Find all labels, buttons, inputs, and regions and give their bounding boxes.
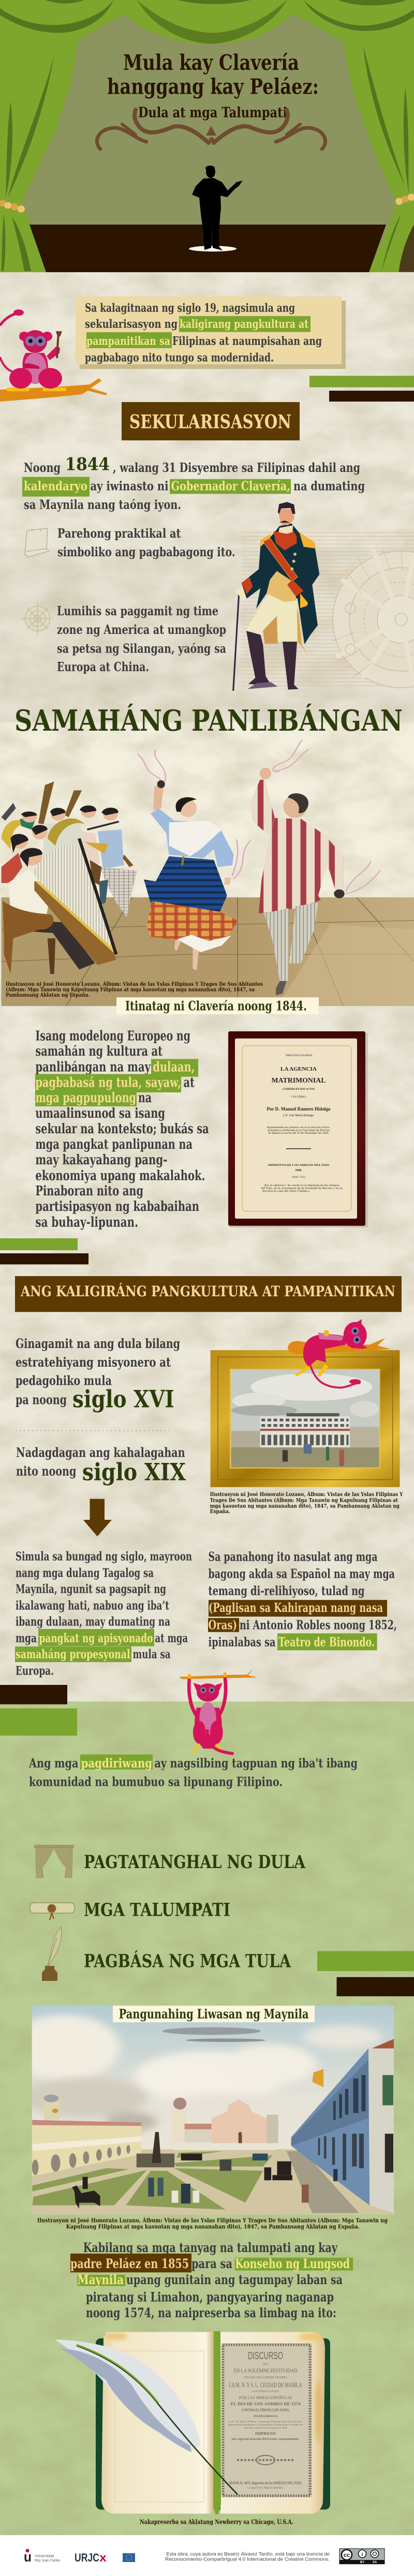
badge: CC BY SA: SA bbox=[373, 2561, 377, 2564]
framed document: La Agencia Matrimonial: Y EN VERSO, bbox=[291, 1096, 306, 1099]
decorative bars section change bbox=[0, 1685, 77, 1736]
text: siglo XIX bbox=[16, 1445, 186, 1486]
framed document: La Agencia Matrimonial: BIBLIOTECA FILIPINA bbox=[286, 1055, 313, 1057]
framed document: La Agencia Matrimonial: COMEDIA EN DOS ACTOS bbox=[283, 1088, 315, 1091]
intro text: Sa kalagitnaan ng siglo 19, nagsimula ang bbox=[85, 301, 295, 315]
text: time zone: zone ng America at umangkop bbox=[57, 622, 226, 637]
framed document: La Agencia Matrimonial: LA AGENCIA bbox=[280, 1067, 317, 1072]
text: siglo XIX: siglo XIX bbox=[82, 1458, 186, 1486]
caption: Liwasan bbox=[37, 2217, 388, 2230]
paragraph: mga dulang Tagalog: Maynila, ngunit sa pagsapit ng bbox=[16, 1582, 166, 1596]
logo: Universidad Rey Juan Carlos bbox=[24, 2549, 60, 2565]
left building bbox=[32, 2095, 141, 2176]
framed document: La Agencia Matrimonial: de Manila la noche del 10 de Diciembre de 1846. bbox=[268, 1132, 329, 1135]
paragraph: mga bagong akda: Teatro de Binondo. bbox=[278, 1634, 375, 1649]
paragraph: European model: partisipasyon ng kababaihan bbox=[35, 1199, 199, 1215]
framed document: La Agencia Matrimonial: IMPRENTA DE LOS AMIGOS DEL PAIS bbox=[268, 1164, 329, 1167]
logo: URJCx: URJC bbox=[75, 2551, 99, 2564]
icon: scroll bbox=[30, 1903, 75, 1920]
paragraph: mga dulang Tagalog: ibang dulaan, may dumating na bbox=[16, 1615, 170, 1629]
paragraph: mga dulang Tagalog: Europa. bbox=[16, 1664, 54, 1678]
decorative bars right bbox=[317, 1951, 414, 1996]
framed document: La Agencia Matrimonial: Por D. Manuel Ramero Hidalgo bbox=[267, 1106, 331, 1112]
logo: Universidad Rey Juan Carlos: Rey Juan Carlos bbox=[35, 2558, 60, 2563]
intro text bbox=[85, 301, 322, 365]
text: time zone: sa petsa ng Silangan, yaóng sa bbox=[57, 641, 226, 656]
printed title page: Discurso: LA M. N. Y S. L. CIUDAD DE MANILA bbox=[229, 2381, 302, 2389]
paragraph: mga dulang Tagalog: samaháng propesyonal bbox=[16, 1648, 130, 1662]
framed document: La Agencia Matrimonial: (Núm. 1711) bbox=[292, 1176, 305, 1179]
licence text: Reconocimiento-CompartirIgual 4.0 Internacional de Creative Commons. bbox=[165, 2556, 330, 2562]
paragraph: mga dulang Tagalog: at mga bbox=[155, 1631, 188, 1645]
text: siglo XVI: estratehiyang misyonero at bbox=[16, 1355, 171, 1370]
tarsier on frame bbox=[288, 1319, 391, 1388]
framed document: La Agencia Matrimonial: 1846. bbox=[295, 1169, 302, 1172]
paragraph: pagdiriwang: pagdiriwang bbox=[81, 1755, 152, 1770]
logo: Universidad Rey Juan Carlos: u bbox=[24, 2549, 32, 2565]
paragraph: padre Peláez: padre Peláez en 1855 bbox=[70, 2256, 189, 2271]
paragraph: padre Peláez: Kabilang sa mga tanyag na talumpati ang kay bbox=[83, 2240, 338, 2255]
caption: painting: España. bbox=[210, 1508, 230, 1515]
illustration: Gobernador Clavería bbox=[233, 502, 319, 691]
sky and clouds bbox=[8, 2006, 394, 2214]
paragraph: European model: panlibángan na may bbox=[35, 1060, 151, 1075]
text: simbolikong pagbabago: simboliko ang pagbabagong ito. bbox=[57, 544, 235, 559]
ornament bbox=[97, 110, 326, 149]
paragraph: European model: pagbabasá ng tula, sayaw, bbox=[35, 1075, 181, 1090]
paragraph: European model: umaalinsunod sa isang bbox=[35, 1106, 165, 1121]
cathedral bbox=[172, 2097, 278, 2150]
badge: CC BY SA: cc bbox=[344, 2552, 350, 2558]
paragraph: European model: na bbox=[138, 1090, 152, 1106]
caption: Liwasan: Kapuluang Filipinas at mga kasuotan ng mga nananahan dito), 1847, sa Pambansang Aklatan ng España. bbox=[66, 2223, 360, 2230]
paragraph: European model: Isang modelong Europeo ng bbox=[35, 1028, 190, 1044]
wood floor bbox=[2, 897, 414, 1006]
caption: dance illustration: Pambansang Aklatan ng España. bbox=[6, 992, 90, 998]
paragraph: mga bagong akda: ipinalabas sa bbox=[208, 1634, 275, 1649]
paragraph: mga bagong akda: Oras) bbox=[208, 1618, 237, 1632]
man dancer bbox=[251, 768, 345, 995]
paragraph: pagdiriwang: ay nagsilbing tagpuan ng iba't ibang bbox=[154, 1755, 358, 1770]
paragraph: padre Peláez bbox=[70, 2240, 353, 2320]
stage backdrop bbox=[21, 13, 395, 272]
badge: CC BY SA: BY bbox=[360, 2561, 364, 2564]
text: time zone: Europa at China. bbox=[57, 659, 149, 674]
icon: calendar bbox=[25, 528, 49, 557]
icon: quill and ink bbox=[42, 1927, 62, 1981]
curtain tiebacks bbox=[0, 194, 414, 213]
paragraph: 1844: kalendaryo bbox=[24, 478, 87, 494]
framed document: La Agencia Matrimonial: (En la cabierta:) ·Se vende en la imprenta de los Amigos bbox=[264, 1185, 339, 1187]
illustration: Liwasan ng Maynila bbox=[8, 2006, 394, 2214]
framed document: La Agencia Matrimonial: del País, en la conserjería de la Sociedad de Recreo y en la bbox=[261, 1187, 343, 1190]
woman dancer bbox=[144, 780, 238, 970]
caption: dance illustration: (Album: Mga Tanawin ng Kapuluang Filipinas at mga kasuotan ng mga nananahan dito), 1847, sa bbox=[6, 987, 255, 993]
musicians bbox=[2, 781, 137, 974]
logo: EU flag bbox=[123, 2553, 135, 2562]
intro box bbox=[76, 297, 346, 369]
right building bbox=[291, 2039, 394, 2213]
paragraph: European model: dulaan, bbox=[153, 1060, 195, 1075]
intro text: pagbabago nito tungo sa modernidad. bbox=[85, 351, 274, 365]
paragraph: 1844: Gobernador Clavería, bbox=[171, 478, 290, 494]
badge: CC BY SA bbox=[339, 2549, 385, 2564]
paragraph: mga bagong akda: temang di-relihiyoso, tulad ng bbox=[208, 1583, 365, 1598]
paragraph: padre Peláez: noong 1574, na naipreserba sa limbag na ito: bbox=[86, 2305, 336, 2320]
paragraph: 1844 bbox=[22, 454, 365, 512]
framed document: La Agencia Matrimonial: Representada por primera vez en la Sección Lírico- bbox=[267, 1127, 330, 1129]
framed document: La Agencia Matrimonial bbox=[228, 1031, 368, 1227]
framed painting bbox=[211, 1350, 400, 1487]
paragraph: mga dulang Tagalog: Simula sa bungad ng siglo, mayroon bbox=[16, 1550, 192, 1564]
printed title page: Discurso: Iglesia Metropolitana y Gobernador General de Cruzada en bbox=[229, 2423, 303, 2426]
illustration: open book with feather bbox=[55, 2331, 330, 2515]
paragraph: European model: sekular na konteksto; bukás sa bbox=[35, 1121, 209, 1137]
paragraph: European model: samahán ng kultura at bbox=[35, 1044, 162, 1059]
speaker silhouette bbox=[192, 166, 243, 250]
paragraph: European model: ekonomiya upang makalahok. bbox=[35, 1168, 205, 1183]
paragraph: European model: Pinaboran nito ang bbox=[35, 1183, 143, 1199]
heading: pagtatanghal ng dula: PAGTATANGHAL NG DULA bbox=[84, 1852, 306, 1873]
printed title page: Discurso: CON QUE ANUALMENTE CELEBRA bbox=[244, 2376, 288, 2379]
title: Dula at mga Talumpati bbox=[138, 105, 287, 121]
text: siglo XVI: siglo XVI bbox=[72, 1385, 174, 1413]
printed title page: Discurso: a cargo de D. Miguel Sanchez. bbox=[247, 2487, 284, 2490]
paragraph: European model bbox=[35, 1028, 209, 1230]
intro text: Filipinas at naumpisahan ang bbox=[172, 334, 322, 348]
intro text: kaligirang pangkultura at bbox=[180, 318, 309, 331]
framed document: La Agencia Matrimonial: MATRIMONIAL bbox=[271, 1077, 326, 1085]
paragraph: pagdiriwang: Ang mga bbox=[28, 1755, 79, 1770]
decorative bars left bbox=[0, 1238, 88, 1264]
printed title page: Discurso: POR LAS ARMAS ESPAÑOLAS bbox=[239, 2395, 292, 2400]
clock engraving background bbox=[242, 529, 414, 688]
tarsier hanging from branch bbox=[179, 1669, 257, 1754]
text: siglo XVI: pa noong bbox=[16, 1392, 67, 1407]
text: siglo XVI: Ginagamit na ang dula bilang bbox=[16, 1336, 180, 1351]
paragraph: padre Peláez: piratang si Limahon, pangyayaring naganap bbox=[86, 2289, 334, 2304]
paragraph: European model: mga pangkat panlipunan na bbox=[35, 1137, 193, 1152]
illustration: dance and musicians bbox=[2, 739, 414, 1006]
heading: Kaligiráng Pangkultura bbox=[15, 1276, 402, 1312]
paragraph: European model: sa buhay-lipunan. bbox=[35, 1215, 138, 1230]
printed title page: Discurso: EN LA SOLEMNE FESTIVIDAD bbox=[234, 2368, 297, 2374]
heading: pagbása ng mga tula: PAGBÁSA NG MGA TULA bbox=[84, 1950, 291, 1972]
text: simbolikong pagbabago: Parehong praktikal at bbox=[57, 526, 181, 541]
paragraph: European model: may kakayahang pang- bbox=[35, 1152, 167, 1168]
printed title page: Discurso: por especial acuerdo del Excmo. Ayuntamiento. bbox=[232, 2438, 300, 2441]
paragraph: mga dulang Tagalog: nang mga dulang Tagalog sa bbox=[16, 1566, 154, 1580]
printed title page: Discurso: EL DIA DE SAN ANDRES DE 1574 bbox=[231, 2402, 300, 2406]
printed title page: Discurso: IMPRESO bbox=[255, 2431, 276, 2436]
framed document: La Agencia Matrimonial: dramática celebrada en la Sociedad de Recreo bbox=[268, 1129, 330, 1132]
licence text: Esta obra, cuya autora es Beatriz Álvarez Tardío, está bajo una licencia de bbox=[167, 2551, 330, 2557]
printed title page: Discurso: LA VICTORIA ALCANZADA bbox=[252, 2391, 279, 2393]
paragraph: 1844: Noong bbox=[24, 460, 61, 475]
tarsier on branch bbox=[0, 309, 107, 402]
text: siglo XIX: nito noong bbox=[16, 1463, 76, 1479]
text: siglo XVI: pedagohiko mula bbox=[16, 1373, 112, 1388]
heading: Sekularisasyon bbox=[122, 402, 300, 440]
framed document: La Agencia Matrimonial: y D. José María Ristiaga. bbox=[283, 1114, 315, 1117]
paragraph: European model: mga pagpupulong bbox=[35, 1090, 136, 1106]
text: time zone: Lumihis sa paggamit ng time bbox=[57, 603, 218, 618]
caption: dance illustration: Ilustrasyon ni José Honorato Lozano, Álbum: Vistas de las Yslas Filipinas Y Trages De Sus Abitantes bbox=[6, 980, 263, 987]
paragraph: European model: at bbox=[184, 1075, 195, 1090]
paragraph: mga dulang Tagalog: mula sa bbox=[133, 1648, 171, 1662]
label: Pangunahing Liwasan: Pangunahing Liwasan ng Maynila bbox=[119, 2007, 308, 2022]
caption: Newberry: Nakapreserba sa Aklatang Newberry sa Chicago, U.S.A. bbox=[140, 2519, 293, 2526]
badge: CC BY SA: i bbox=[362, 2552, 363, 2557]
heading: mga talumpati: MGA TALUMPATI bbox=[84, 1900, 230, 1921]
printed title page: Discurso: CONTRA EL PIRATA LIM-AONG, bbox=[241, 2408, 290, 2412]
paragraph: mga dulang Tagalog bbox=[15, 1550, 192, 1678]
intro text: sekularisasyon ng bbox=[85, 318, 178, 331]
title: Mula kay Clavería bbox=[123, 50, 299, 75]
spotlight bbox=[189, 246, 236, 251]
icon: compass bbox=[22, 602, 53, 635]
curtain folds bbox=[0, 0, 414, 272]
intro text: pampanitikan sa bbox=[86, 334, 170, 348]
text: siglo XIX: Nadagdagan ang kahalagahan bbox=[16, 1445, 185, 1460]
paragraph: mga dulang Tagalog: ikalawang hati, nabuo ang iba’t bbox=[16, 1598, 169, 1612]
feather bbox=[55, 2340, 238, 2495]
paragraph: 1844: na dumating bbox=[293, 478, 365, 494]
arrow down bbox=[83, 1499, 112, 1536]
label: founded 1844: Itinatag ni Clavería noong 1844. bbox=[125, 999, 307, 1014]
caption: painting bbox=[210, 1490, 403, 1515]
figures and carriages bbox=[72, 2154, 337, 2209]
paragraph: mga dulang Tagalog: pangkat ng apisyonado bbox=[39, 1631, 153, 1645]
paragraph: pagdiriwang: komunidad na bumubuo sa lipunang Filipino. bbox=[29, 1774, 283, 1789]
title: hanggang kay Peláez: bbox=[107, 75, 319, 99]
printed title page: Discurso: PANEGIRICO bbox=[254, 2415, 277, 2418]
stage floor bbox=[29, 225, 386, 272]
paragraph: 1844: sa Maynila nang taóng iyon. bbox=[24, 497, 181, 512]
framed document: La Agencia Matrimonial: Escuela en casa del chino Chalian.» bbox=[262, 1190, 310, 1193]
logo: Universidad Rey Juan Carlos: Universidad bbox=[35, 2553, 54, 2558]
paragraph: mga dulang Tagalog: mga bbox=[16, 1631, 37, 1645]
printed title page: Discurso: QUE bbox=[263, 2363, 268, 2366]
ground bbox=[32, 2149, 394, 2214]
icon: curtains bbox=[35, 1845, 73, 1878]
paragraph: pagdiriwang bbox=[28, 1754, 358, 1789]
printed title page: Discurso bbox=[221, 2344, 312, 2497]
title bbox=[107, 50, 319, 121]
heading: Sekularisasyon: SEKULARISASYON bbox=[129, 411, 291, 433]
paragraph: padre Peláez: para sa bbox=[191, 2256, 232, 2271]
paragraph: padre Peláez: upang gunitain ang tagumpay laban sa bbox=[126, 2272, 343, 2287]
logo: URJCx: x bbox=[99, 2551, 107, 2564]
printed title page: Discurso: DISCURSO bbox=[248, 2350, 283, 2362]
paragraph: 1844: 1844 bbox=[65, 454, 110, 475]
text: simbolikong pagbabago bbox=[57, 526, 235, 559]
stage header bbox=[0, 0, 414, 272]
text: time zone bbox=[57, 603, 226, 674]
printed title page: Discurso: estas Islas, el día 30 de Noviembre de 1854. bbox=[243, 2426, 288, 2430]
licence text bbox=[165, 2551, 330, 2562]
paragraph: padre Peláez: Maynila bbox=[78, 2272, 124, 2287]
paragraph: 1844: ay iwinasto ni bbox=[90, 478, 169, 494]
decorative bars top right bbox=[309, 376, 414, 402]
printed title page: Discurso: MANILA: 1855. Imprenta de los AMIGOS DEL PAIS, bbox=[229, 2481, 302, 2485]
text: siglo XVI bbox=[16, 1336, 180, 1413]
printed title page: Discurso: el Sr. D. Pedro Pelaez, Canónigo Penitenciario de esta Sta. bbox=[229, 2420, 302, 2423]
footer bbox=[24, 2549, 385, 2565]
ribbons bbox=[137, 739, 380, 894]
paragraph: padre Peláez: Konseho ng Lungsod bbox=[235, 2256, 350, 2271]
caption: dance illustration bbox=[6, 980, 263, 998]
paragraph: mga bagong akda bbox=[208, 1549, 397, 1650]
statue in fence bbox=[137, 2132, 174, 2167]
